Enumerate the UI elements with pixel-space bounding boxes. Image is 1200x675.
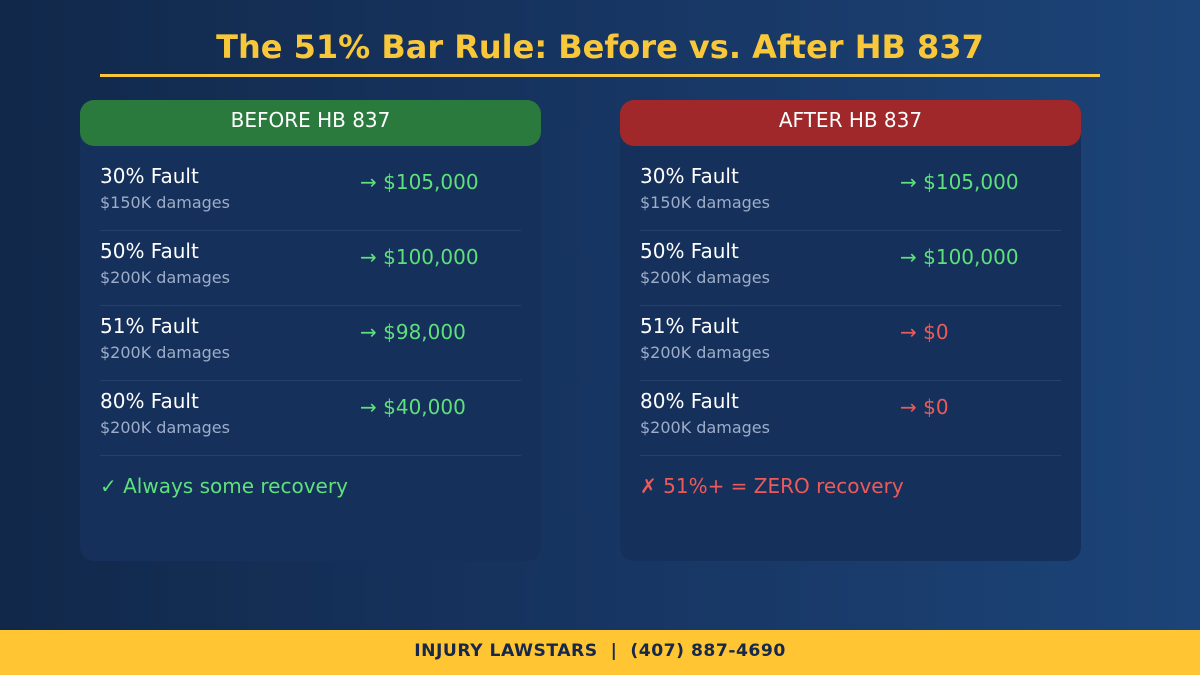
row: 51%: $200K damages (640, 343, 770, 362)
row: 30%: 30% Fault (100, 164, 199, 188)
row: 30%: → $105,000 (360, 170, 479, 194)
panel: after (620, 100, 1081, 561)
header: before (80, 100, 541, 146)
title: The 51% Bar Rule: Before vs. After HB 837 (216, 28, 984, 66)
row: 51%: → $98,000 (360, 320, 466, 344)
row: 51%: $200K damages (100, 343, 230, 362)
note: after: ✗ 51%+ = ZERO recovery (640, 474, 904, 498)
row: 50%: $200K damages (100, 268, 230, 287)
row: 30% (640, 156, 1061, 231)
row: 80%: 80% Fault (100, 389, 199, 413)
row: 50%: 50% Fault (640, 239, 739, 263)
row: 80%: $200K damages (640, 418, 770, 437)
row: 80%: → $0 (900, 395, 949, 419)
row: 30%: → $105,000 (900, 170, 1019, 194)
row: 50% (100, 231, 521, 306)
row: 30%: 30% Fault (640, 164, 739, 188)
row: 30%: $150K damages (640, 193, 770, 212)
header: after: AFTER HB 837 (779, 108, 922, 132)
row: 50% (640, 231, 1061, 306)
row: 80%: 80% Fault (640, 389, 739, 413)
row: 30% (100, 156, 521, 231)
row: 51%: → $0 (900, 320, 949, 344)
row: 80%: $200K damages (100, 418, 230, 437)
row: 50%: → $100,000 (360, 245, 479, 269)
header: before: BEFORE HB 837 (231, 108, 390, 132)
row: 50%: $200K damages (640, 268, 770, 287)
row: 51% (100, 306, 521, 381)
row: 80%: → $40,000 (360, 395, 466, 419)
row: 51%: 51% Fault (640, 314, 739, 338)
note: before: ✓ Always some recovery (100, 474, 348, 498)
panel: before (80, 100, 541, 561)
footer (0, 630, 1200, 675)
row: 50%: 50% Fault (100, 239, 199, 263)
row: 50%: → $100,000 (900, 245, 1019, 269)
row: 80% (640, 381, 1061, 456)
row: 51% (640, 306, 1061, 381)
row: 51%: 51% Fault (100, 314, 199, 338)
footer: INJURY LAWSTARS | (407) 887-4690 (414, 641, 786, 661)
row: 30%: $150K damages (100, 193, 230, 212)
header: after (620, 100, 1081, 146)
row: 80% (100, 381, 521, 456)
